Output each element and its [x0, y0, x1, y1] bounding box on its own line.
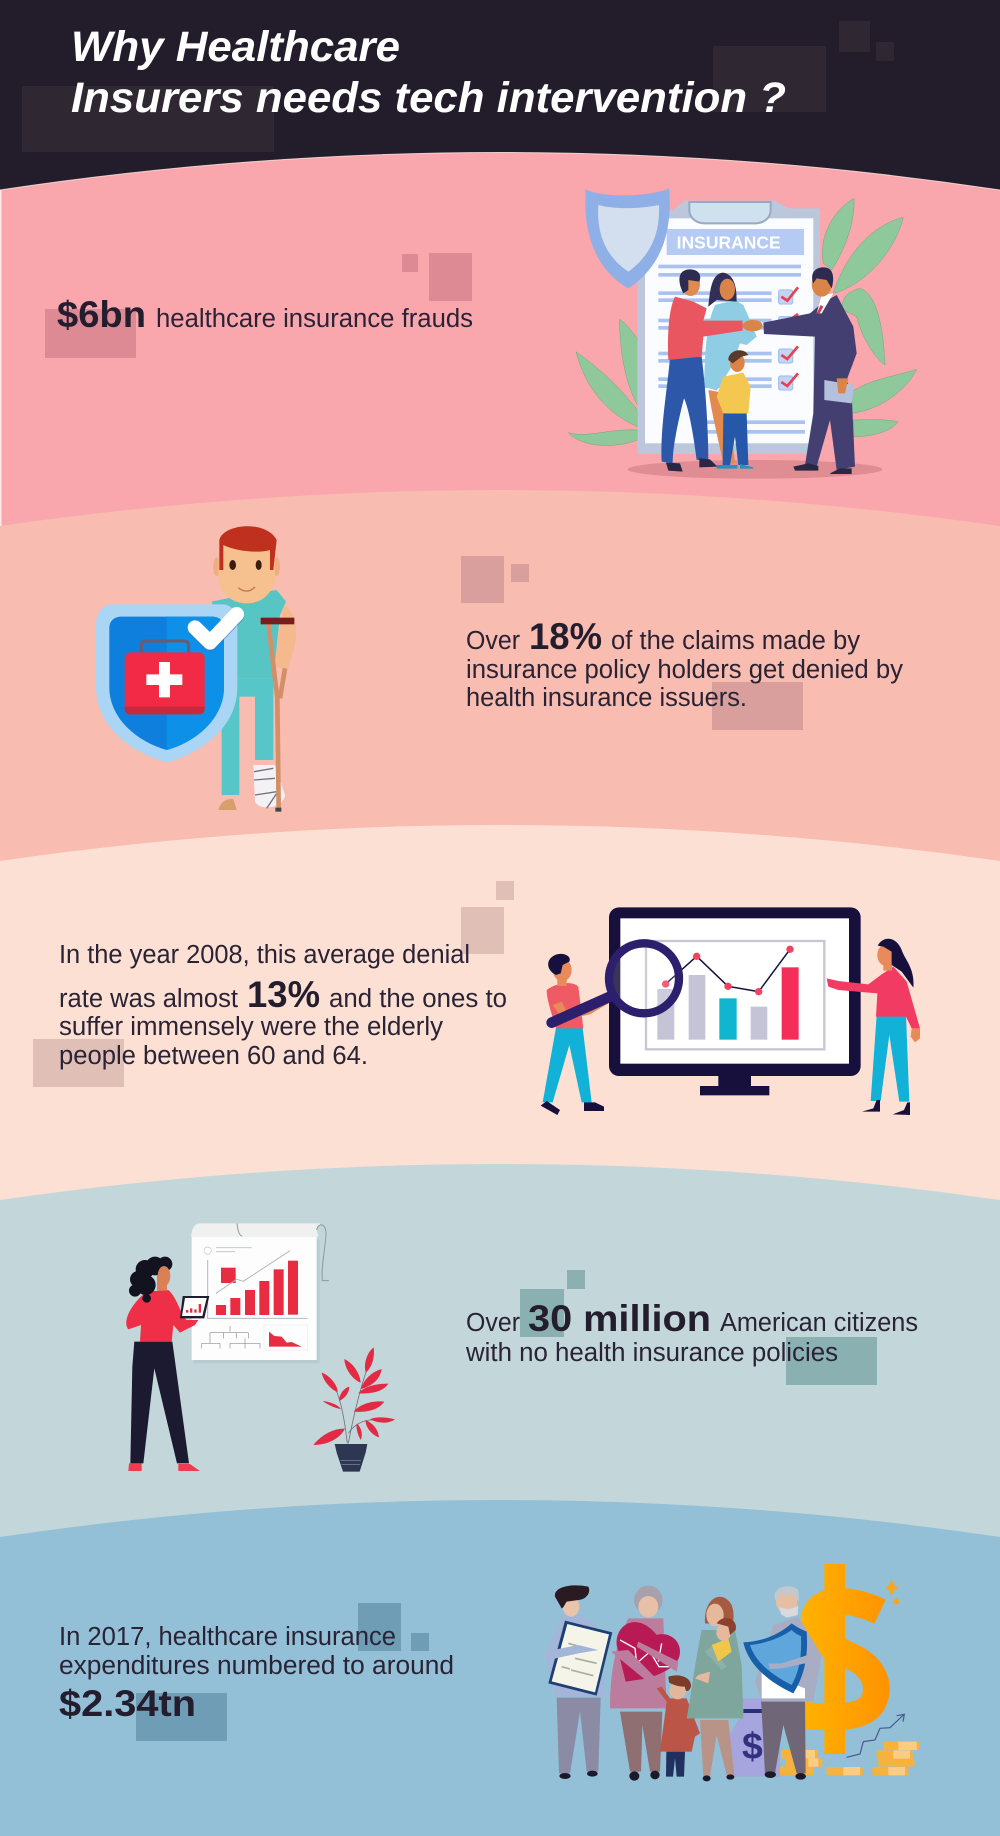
text: 2008 denial rate: In the year 2008, this average denial	[59, 941, 470, 969]
text: 2008 denial rate: people between 60 and 64.	[59, 1042, 368, 1070]
dollar sign	[803, 1564, 899, 1754]
man with magnifier	[541, 943, 679, 1115]
text: 2017 expenditures	[59, 1623, 454, 1724]
patient	[212, 526, 296, 810]
agent in suit	[743, 267, 857, 474]
panel: claims background	[0, 490, 1000, 880]
illustration: patient with crutch and shield	[96, 526, 296, 812]
woman with tablet	[126, 1257, 209, 1471]
panel: expenditure background	[0, 1500, 1000, 1836]
text: uninsured citizens: American citizens	[720, 1309, 918, 1337]
text: claims denied: of the claims made by	[611, 627, 860, 655]
title: Insurers needs tech intervention ?	[71, 74, 786, 122]
text: 2008 denial rate: rate was almost	[59, 985, 238, 1013]
text: 2017 expenditures: expenditures numbered to around	[59, 1652, 454, 1680]
panel: fraud background	[0, 152, 1000, 540]
text: 2008 denial rate: and the ones to	[329, 985, 507, 1013]
text: fraud stat	[57, 294, 473, 335]
man in red	[661, 269, 743, 472]
text: uninsured citizens: 30 million	[528, 1298, 711, 1339]
clipboard	[637, 201, 820, 454]
illustration: family with dollar sign	[545, 1564, 919, 1781]
crutch	[262, 619, 293, 812]
woman presenting	[827, 939, 920, 1115]
mother and baby	[687, 1597, 743, 1781]
child	[657, 1675, 700, 1777]
text: claims denied: 18%	[529, 616, 602, 657]
text: claims denied: insurance policy holders get denied by	[466, 656, 903, 684]
decorative squares: claims	[461, 556, 803, 730]
text: 2008 denial rate: 13%	[247, 974, 320, 1015]
text: 2008 denial rate: suffer immensely were the elderly	[59, 1013, 443, 1041]
text: 2008 denial rate	[59, 941, 507, 1070]
illustration: monitor analysis	[541, 907, 920, 1115]
shield	[585, 188, 670, 288]
text: uninsured citizens: Over	[466, 1309, 520, 1337]
text: claims denied: Over	[466, 627, 520, 655]
coins and growth arrow	[777, 1714, 919, 1775]
header band	[0, 0, 1000, 200]
illustration: family signing insurance	[568, 188, 917, 479]
doctor	[545, 1585, 612, 1779]
grandmother with heart	[610, 1586, 680, 1781]
boy	[717, 350, 753, 469]
text: claims denied	[466, 616, 903, 712]
text: uninsured citizens	[465, 1298, 918, 1367]
poster	[191, 1223, 329, 1363]
leaves	[568, 198, 917, 446]
text: 2017 expenditures: $2.34tn	[59, 1683, 196, 1724]
text: uninsured citizens: with no health insurance policies	[465, 1339, 838, 1367]
text: fraud stat: $6bn	[57, 294, 146, 335]
decorative squares: fraud	[45, 253, 472, 358]
text: claims denied: health insurance issuers.	[466, 684, 747, 712]
decorative squares: expenditure	[136, 1603, 429, 1741]
title	[71, 23, 786, 122]
panel: denial rate background	[0, 825, 1000, 1220]
shield with first aid kit	[96, 604, 237, 762]
decorative squares: header	[22, 21, 894, 152]
decorative squares: uninsured	[520, 1270, 877, 1385]
monitor	[609, 907, 861, 1095]
potted plant	[313, 1347, 395, 1472]
bar and line chart	[646, 941, 824, 1049]
text: fraud stat: healthcare insurance frauds	[156, 305, 473, 333]
illustration: woman with chart poster and plant	[126, 1223, 395, 1472]
panel: uninsured background	[0, 1164, 1000, 1560]
woman	[704, 273, 757, 463]
decorative squares: denial	[33, 881, 514, 1087]
text: 2017 expenditures: In 2017, healthcare insurance	[59, 1623, 396, 1651]
grandfather with shield	[743, 1586, 822, 1780]
money bag: $	[742, 1724, 763, 1766]
title: Why Healthcare	[71, 23, 400, 71]
money bag	[726, 1698, 780, 1777]
clipboard: INSURANCE	[677, 232, 781, 252]
